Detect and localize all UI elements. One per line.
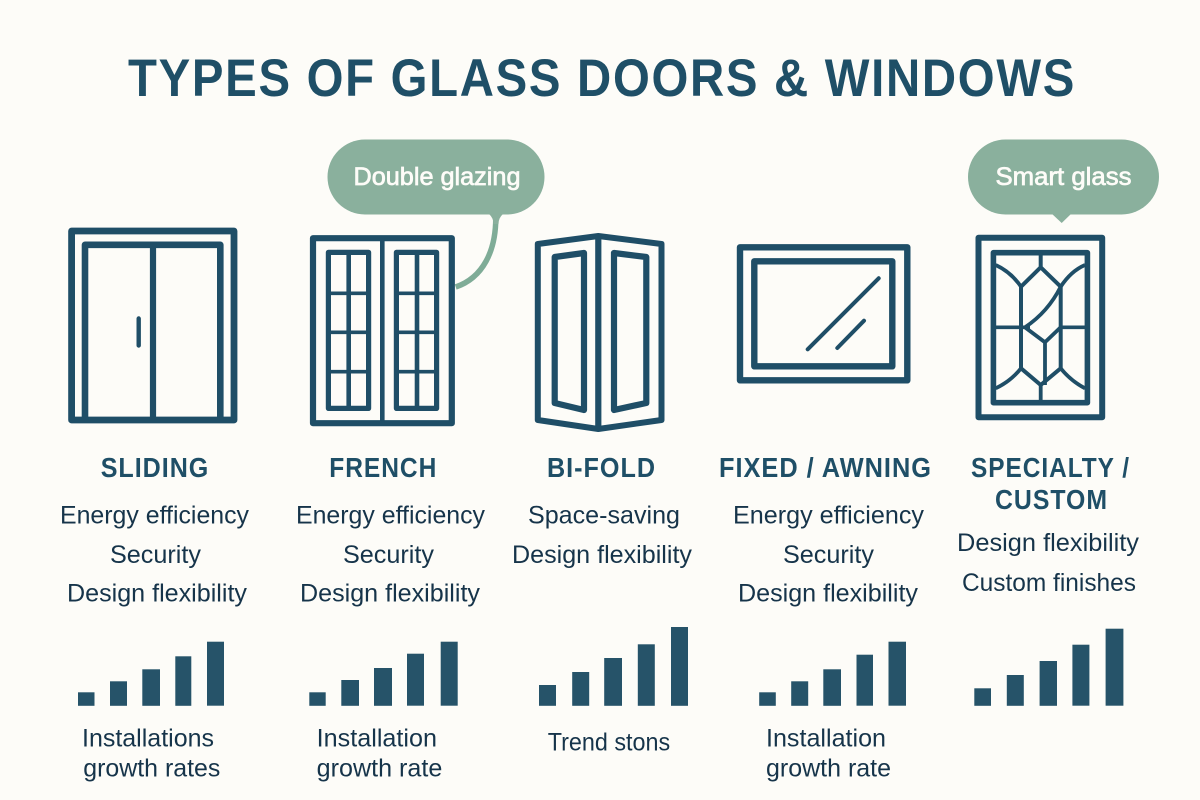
heading: fixed / awning: FIXED / AWNING	[719, 452, 932, 483]
column: specialty / custom	[957, 452, 1139, 706]
feature list: specialty / custom	[957, 529, 1139, 597]
bar chart: specialty / custom	[974, 629, 1123, 706]
feature list: sliding: Energy efficiency	[60, 501, 249, 529]
feature list: bi-fold	[512, 501, 692, 569]
icon: specialty custom window	[978, 238, 1102, 417]
feature list: specialty / custom: Custom finishes	[962, 569, 1136, 597]
feature list: sliding	[60, 501, 249, 608]
column: fixed / awning	[719, 452, 932, 783]
feature list: french: Energy efficiency	[296, 501, 485, 529]
feature list: specialty / custom: Design flexibility	[957, 529, 1139, 557]
icon: sliding door	[72, 231, 234, 420]
feature list: fixed / awning: Energy efficiency	[733, 501, 924, 529]
feature list: fixed / awning	[733, 501, 924, 608]
feature list: fixed / awning: Design flexibility	[738, 580, 918, 608]
chart label: french	[317, 725, 442, 783]
feature list: french: Design flexibility	[300, 580, 480, 608]
feature list: sliding: Security	[110, 541, 201, 569]
bar chart: french	[309, 642, 458, 706]
callout: double glazing	[328, 140, 544, 287]
bar chart: sliding	[78, 642, 224, 706]
heading: french: FRENCH	[329, 452, 437, 483]
title: TYPES OF GLASS DOORS & WINDOWS	[128, 49, 1076, 108]
feature list: bi-fold: Space-saving	[528, 501, 680, 529]
feature list: bi-fold: Design flexibility	[512, 541, 692, 569]
feature list: sliding: Design flexibility	[67, 580, 247, 608]
callout: double glazing: Double glazing	[354, 163, 520, 191]
callout: smart glass	[968, 140, 1159, 223]
feature list: french	[296, 501, 485, 608]
column: french	[296, 452, 485, 783]
icon: bi-fold door	[538, 236, 662, 429]
column: bi-fold	[512, 452, 692, 757]
icon: fixed awning window	[740, 247, 907, 380]
heading: specialty / custom: SPECIALTY /	[971, 452, 1130, 483]
chart label: sliding: growth rates	[83, 755, 220, 783]
chart label: bi-fold: Trend stons	[548, 729, 670, 757]
heading: specialty / custom: CUSTOM	[995, 484, 1108, 515]
column: sliding	[60, 452, 249, 783]
icon: french door	[313, 238, 452, 423]
heading: bi-fold: BI-FOLD	[547, 452, 656, 483]
feature list: french: Security	[343, 541, 434, 569]
chart label: fixed / awning: Installation	[766, 725, 886, 753]
chart label: french: growth rate	[317, 755, 442, 783]
bar chart: bi-fold	[539, 627, 688, 706]
chart label: sliding	[82, 725, 220, 783]
chart label: fixed / awning	[766, 725, 891, 783]
heading: sliding: SLIDING	[101, 452, 209, 483]
bar chart: fixed / awning	[759, 642, 906, 706]
chart label: fixed / awning: growth rate	[766, 755, 891, 783]
callout: smart glass: Smart glass	[996, 163, 1132, 191]
chart label: sliding: Installations	[82, 725, 214, 753]
heading: specialty / custom	[971, 452, 1130, 515]
feature list: fixed / awning: Security	[783, 541, 874, 569]
chart label: french: Installation	[317, 725, 437, 753]
